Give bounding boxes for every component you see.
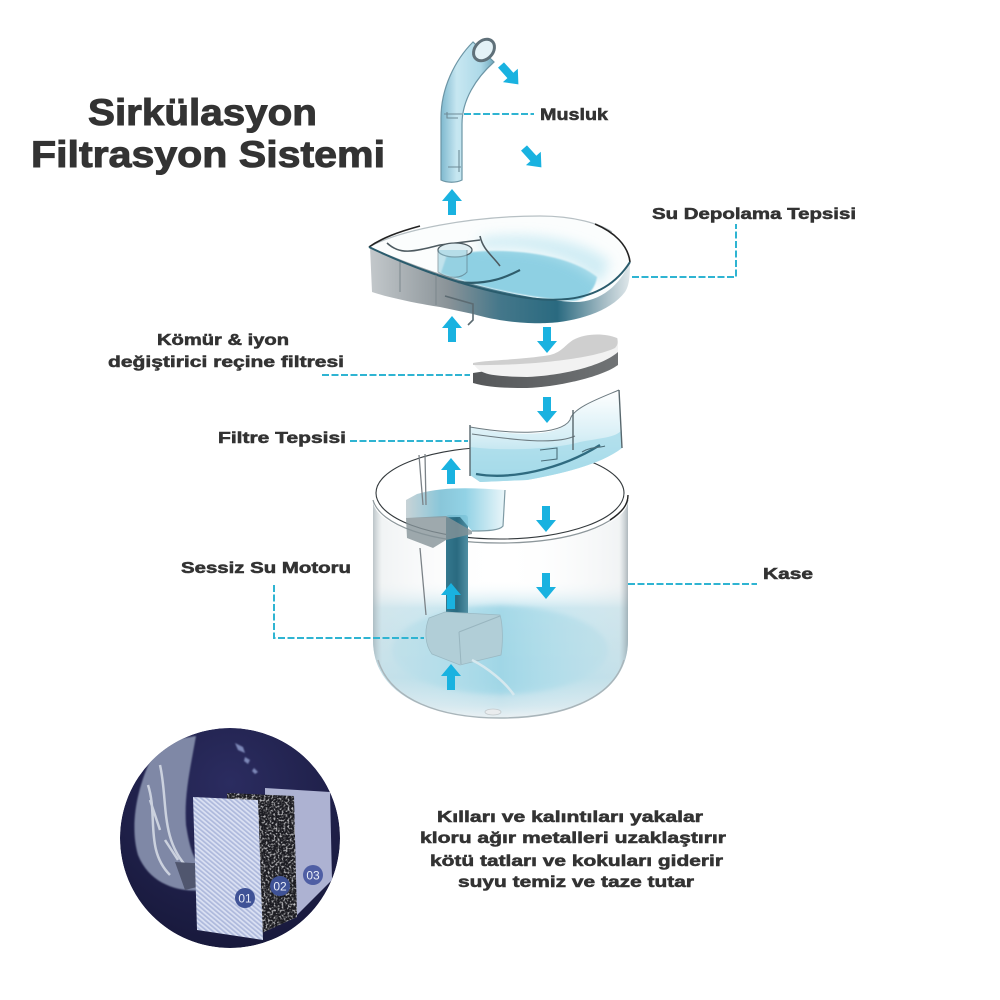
- sheet 01: [193, 797, 263, 940]
- tray water: [441, 251, 597, 301]
- tray rim: [369, 216, 612, 247]
- description text: kötü tatları ve kokuları giderir: [430, 853, 723, 870]
- label: faucet: Musluk: [540, 105, 609, 124]
- curved tube: [134, 735, 197, 892]
- label: bowl: Kase: [763, 566, 813, 583]
- bowl sides: [373, 500, 628, 718]
- description text: suyu temiz ve taze tutar: [458, 874, 694, 891]
- label: water pump: Sessiz Su Motoru: [181, 560, 351, 577]
- top box: [406, 488, 505, 531]
- title: [31, 92, 385, 175]
- description text: [420, 809, 726, 891]
- label: water pump: [181, 560, 424, 638]
- label: storage tray: [632, 206, 856, 277]
- number badges: 03: [306, 868, 320, 882]
- pipe: [446, 515, 468, 618]
- label: charcoal filter: [108, 332, 470, 375]
- charcoal filter: [473, 334, 618, 388]
- tray inner channel: [387, 236, 500, 266]
- title: Sirkülasyon: [88, 92, 317, 133]
- label: filter tray: Filtre Tepsisi: [218, 430, 346, 447]
- water pump assembly: [406, 454, 514, 695]
- bowl rim: [376, 447, 624, 539]
- pump: [426, 612, 502, 665]
- title: Filtrasyon Sistemi: [31, 134, 385, 175]
- flow arrows: [441, 58, 557, 690]
- description text: kloru ağır metalleri uzaklaştırır: [420, 830, 726, 847]
- photo background: [120, 728, 340, 948]
- filter tray: [470, 390, 622, 482]
- bowl water: [373, 580, 628, 720]
- filter layers photo: [120, 728, 340, 948]
- tray interior: [369, 216, 630, 302]
- bowl base: [378, 660, 624, 718]
- number badges: [235, 865, 323, 908]
- sheet 03: [265, 788, 332, 920]
- description text: Kılları ve kalıntıları yakalar: [437, 809, 703, 826]
- number badges: 02: [273, 880, 287, 894]
- bowl: [373, 447, 628, 720]
- pump cable: [472, 660, 514, 695]
- sheet 02: [227, 793, 297, 933]
- label: storage tray: Su Depolama Tepsisi: [652, 206, 856, 223]
- storage tray: [369, 216, 630, 325]
- number badges: 01: [238, 892, 252, 906]
- droplets: [235, 743, 258, 774]
- label: charcoal filter: Kömür & iyon: [157, 332, 289, 349]
- tray wall: [370, 247, 630, 323]
- faucet: [441, 35, 499, 182]
- label: charcoal filter: değiştirici reçine filtresi: [108, 354, 344, 371]
